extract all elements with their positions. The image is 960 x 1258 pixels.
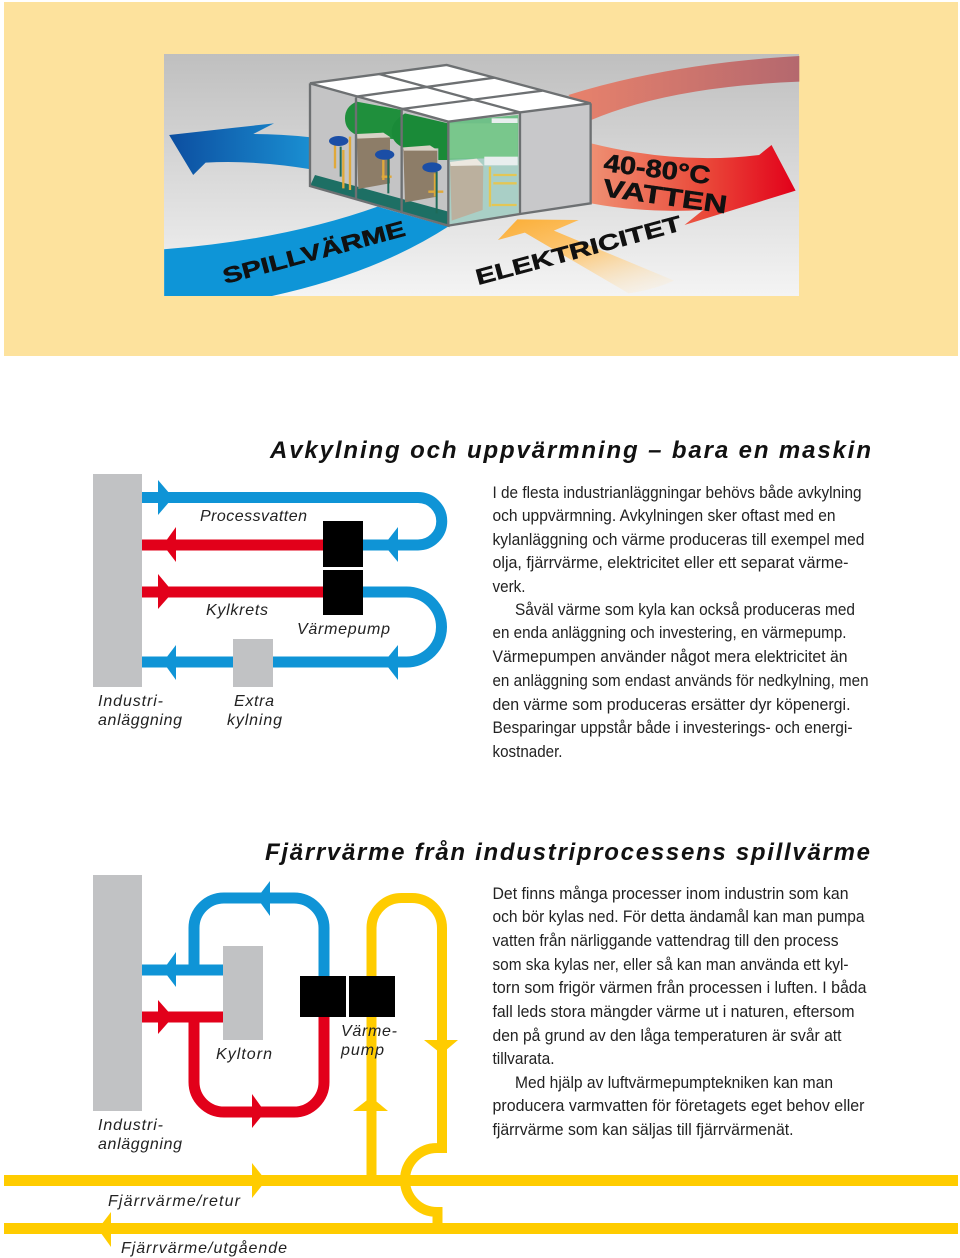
pipes: district heating return and supply bbox=[4, 1180, 958, 1228]
label: Värmepump: Värme- bbox=[341, 1023, 397, 1040]
pipes: blue loop bbox=[142, 898, 324, 977]
arrow: faded warm flow bbox=[568, 56, 799, 120]
left side interior bbox=[310, 83, 448, 226]
arrow: incoming waste heat bbox=[164, 207, 448, 296]
tanks bbox=[345, 102, 402, 140]
text block: section 1: olja, fjärrvärme, elektricitet eller ett separat värme- bbox=[492, 554, 848, 572]
text block: section 1: och uppvärmning. Avkylningen sker oftast med en bbox=[492, 507, 836, 525]
arrow: outgoing cold water bbox=[169, 123, 311, 175]
pipes: blue cooling circuit bbox=[142, 592, 442, 662]
roof panels bbox=[310, 65, 591, 122]
text block: section 2: Med hjälp av luftvärmepumptekniken kan man bbox=[515, 1074, 833, 1092]
heading: section 2: Fjärrvärme från industriprocessens spillvärme bbox=[265, 839, 870, 866]
label: Värmepump: pump bbox=[340, 1042, 384, 1059]
text block: section 1: Såväl värme som kyla kan också produceras med bbox=[515, 601, 855, 619]
text block: section 1: kylanläggning och värme produceras till exempel med bbox=[492, 531, 864, 549]
label: Extra kylning bbox=[227, 693, 282, 729]
label: Industrianläggning bbox=[98, 1117, 182, 1153]
heat exchangers bbox=[357, 136, 390, 189]
pipes: yellow heat pump loop bbox=[372, 898, 442, 1228]
text block: section 1: kostnader. bbox=[492, 743, 562, 761]
text block: section 2 bbox=[492, 885, 867, 1139]
text block: section 2: producera varmvatten för företagets eget behov eller bbox=[492, 1097, 865, 1115]
arrow: hot water out bbox=[591, 143, 796, 225]
front window interior bbox=[448, 115, 518, 226]
label: VATTEN: VATTEN bbox=[601, 174, 729, 219]
heading: section 1: Avkylning och uppvärmning – bara en maskin bbox=[269, 437, 871, 464]
arrows: energy flows bbox=[164, 56, 799, 296]
diagram: district heating bbox=[4, 875, 958, 1257]
text block: section 1: verk. bbox=[492, 578, 526, 596]
label: Industrianläggning: anläggning bbox=[98, 1136, 182, 1153]
illustration: heat pump machine with flows bbox=[164, 54, 799, 296]
label: Industrianläggning: Industri- bbox=[98, 693, 163, 710]
block: extra cooling bbox=[233, 639, 273, 687]
label: Fjärrvärme/utgående: Fjärrvärme/utgående bbox=[121, 1239, 287, 1257]
panel: yellow header background bbox=[4, 2, 958, 356]
diagram: cooling and heating bbox=[93, 474, 442, 729]
arrows: flow direction bbox=[98, 881, 458, 1247]
label: Industrianläggning: Industri- bbox=[98, 1117, 163, 1134]
label: Kylkrets: Kylkrets bbox=[206, 602, 268, 619]
text block: section 1: Värmepumpen använder något mera elektricitet än bbox=[492, 648, 848, 666]
text block: section 2: vatten från närliggande vattendrag till den process bbox=[492, 932, 838, 950]
text block: section 2: tillvarata. bbox=[492, 1050, 554, 1068]
text block: section 2: fall leds stora mängder värme ut i naturen, eftersom bbox=[492, 1003, 854, 1021]
image background bbox=[164, 54, 799, 296]
pipes: blue process water bbox=[142, 498, 442, 545]
label: Värmepump bbox=[340, 1023, 397, 1059]
right panel bbox=[520, 103, 591, 214]
block: heat pump right bbox=[349, 976, 395, 1017]
arrow: electricity in bbox=[498, 219, 674, 293]
block: heat pump left bbox=[300, 976, 346, 1017]
text block: section 2: den på grund av den låga temperaturen är svår att bbox=[492, 1027, 842, 1045]
text block: section 2: Det finns många processer inom industrin som kan bbox=[492, 885, 848, 903]
text block: section 1: en enda anläggning och investering, en värmepump. bbox=[492, 624, 846, 642]
label: Kyltorn: Kyltorn bbox=[216, 1046, 272, 1063]
text block: section 1 bbox=[492, 484, 868, 761]
motors bbox=[329, 136, 348, 146]
cabinet frame bbox=[310, 65, 591, 226]
text block: section 1: en anläggning som endast används för nedkylning, men bbox=[492, 672, 868, 690]
label: ELEKTRICITET: ELEKTRICITET bbox=[473, 211, 685, 290]
text block: section 1: den värme som produceras ersätter dyr köpenergi. bbox=[492, 696, 850, 714]
text block: section 2: fjärrvärme som kan säljas till fjärrvärmenät. bbox=[492, 1121, 794, 1139]
label: 40-80°C: 40-80°C bbox=[602, 149, 712, 190]
label: Fjärrvärme/retur: Fjärrvärme/retur bbox=[108, 1193, 241, 1210]
label: Processvatten: Processvatten bbox=[200, 508, 307, 525]
text block: section 2: torn som frigör värmen från processen i luften. I båda bbox=[492, 979, 867, 997]
text block: section 1: Besparingar uppstår både i investerings- och energi- bbox=[492, 719, 852, 737]
text block: section 1: I de flesta industrianläggningar behövs både avkylning bbox=[492, 484, 862, 502]
text block: section 2: som ska kylas ner, eller så kan man använda ett kyl- bbox=[492, 956, 848, 974]
label: Extra kylning: kylning bbox=[227, 712, 282, 729]
block: industrial plant bbox=[93, 474, 142, 687]
pipes: red loop bbox=[142, 1016, 324, 1112]
block: industrial plant bbox=[93, 875, 142, 1111]
label: Extra kylning: Extra bbox=[234, 693, 274, 710]
machine cabinet bbox=[310, 65, 591, 226]
label: SPILLVÄRME: SPILLVÄRME bbox=[220, 216, 408, 289]
label: Industrianläggning: anläggning bbox=[98, 712, 182, 729]
text block: section 2: och bör kylas ned. För detta ändamål kan man pumpa bbox=[492, 908, 865, 926]
label: Värmepump: Värmepump bbox=[297, 621, 390, 638]
label: Industrianläggning bbox=[98, 693, 182, 729]
block: cooling tower bbox=[223, 946, 263, 1040]
arrows: flow direction bbox=[158, 480, 398, 680]
floor bbox=[310, 175, 448, 226]
pipes bbox=[335, 137, 443, 197]
pipe: red cooling circuit bbox=[142, 586, 323, 598]
block: heat pump lower bbox=[323, 570, 363, 615]
block: heat pump upper bbox=[323, 521, 363, 567]
pipe: red process water bbox=[142, 540, 323, 550]
